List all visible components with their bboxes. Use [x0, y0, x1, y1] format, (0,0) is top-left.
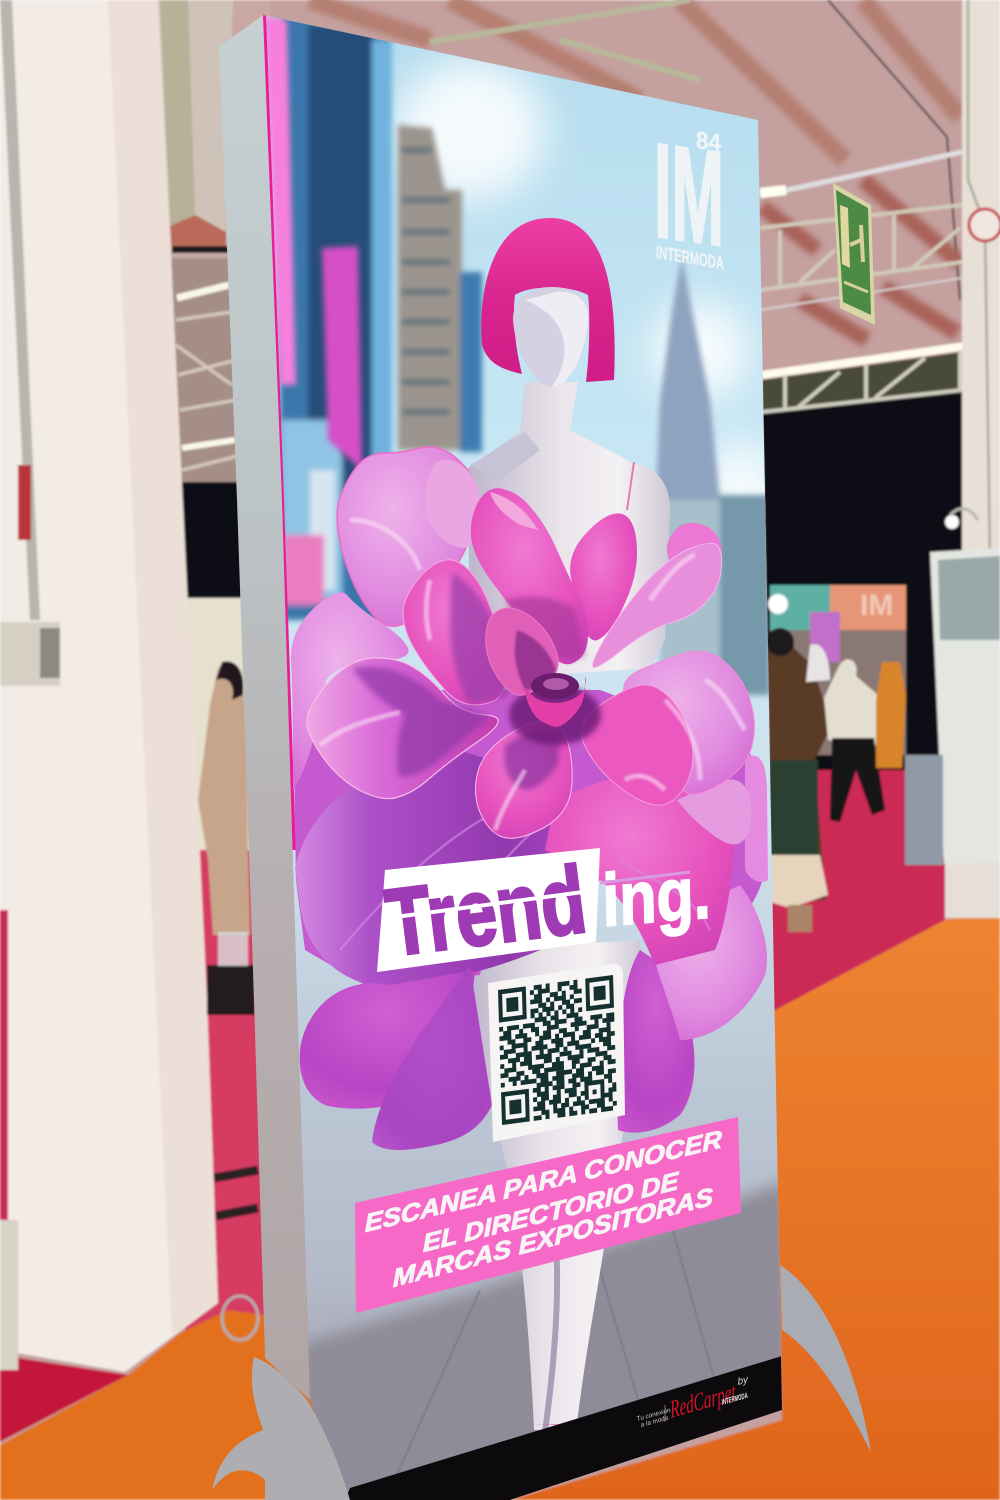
straps: [627, 462, 634, 510]
stamens: [531, 673, 579, 699]
crimson floor right: [765, 770, 945, 1012]
highlights: [320, 520, 745, 830]
banner text: [365, 1125, 722, 1293]
blurred city buildings: [280, 0, 770, 695]
Intermoda logo: INTERMODA: [656, 242, 724, 274]
left stand foot: [212, 1357, 350, 1500]
Trending label box: [377, 848, 600, 972]
translucent petal over body: [425, 460, 479, 548]
background: fair hall: IM: [860, 589, 893, 622]
top centre petal: [471, 488, 588, 664]
dark truss zone: [762, 352, 962, 415]
light strips right: [760, 152, 962, 196]
flower dress: [291, 447, 768, 1150]
Red Carpet footer logo: Tu conexión: [636, 1407, 671, 1423]
mannequin torso: [468, 382, 670, 680]
bottom black strip: [345, 1356, 782, 1500]
magenta neon signs: [264, 15, 362, 470]
QR code sticker: [488, 964, 625, 1142]
Red Carpet footer logo: a la moda: [640, 1414, 669, 1429]
ceiling beams top: [310, 0, 960, 160]
clouds: [395, 60, 780, 560]
petal right of neckline: [570, 513, 637, 640]
box upper left: [158, 0, 233, 232]
hair: [481, 218, 615, 382]
Trending title: Trend: [380, 847, 592, 977]
skirt streaks: [339, 818, 711, 950]
woman orange dress: [876, 662, 906, 768]
Intermoda logo: IM: [654, 115, 724, 275]
crimson corner left: [0, 1355, 128, 1442]
beams under truss: [762, 180, 960, 340]
right big petal: [623, 651, 754, 794]
red label: [18, 465, 31, 540]
right back petals: [745, 756, 768, 882]
Red Carpet footer logo: INTERMODA: [721, 1391, 748, 1407]
left front petal: [307, 658, 498, 799]
bottom centre petal: [476, 721, 572, 838]
black wall right: [762, 392, 965, 780]
info board right: [930, 548, 1000, 864]
sky background: [250, 0, 790, 1500]
gap left of panel: [160, 0, 270, 262]
QR code modules: [498, 977, 617, 1123]
mannequin legs: [468, 940, 641, 1432]
Intermoda logo: 84: [696, 127, 722, 157]
street pavement: [300, 1180, 790, 1500]
right stand foot: [780, 1265, 871, 1452]
booth right: [770, 585, 835, 750]
Red Carpet footer logo: [636, 1374, 749, 1429]
right mid petal: [582, 685, 693, 805]
lower skirt petals: [295, 745, 600, 986]
base mass of dress: [293, 690, 766, 988]
small centre petal: [486, 608, 558, 695]
left pillar: [0, 0, 218, 1372]
exit sign: [833, 183, 875, 325]
banner text: MARCAS EXPOSITORAS: [393, 1182, 714, 1293]
lamp right: [945, 515, 959, 529]
orange floor left: [0, 1310, 345, 1500]
poster: front face: [250, 0, 790, 1500]
pink call-to-action banner: [355, 1117, 741, 1313]
Trending title: ing.: [602, 850, 711, 942]
Red Carpet footer logo: RedCarpet: [668, 1378, 738, 1424]
side of totem: [219, 15, 310, 1400]
right wing petal: [593, 543, 722, 667]
upper left centre petal: [403, 560, 506, 705]
junction box: [0, 622, 60, 686]
top-left large petal: [337, 447, 476, 626]
man brown jacket: [768, 629, 832, 902]
banner text: EL DIRECTORIO DE: [423, 1167, 680, 1258]
Red Carpet footer logo: by: [737, 1374, 749, 1388]
face: [513, 287, 589, 387]
orange floor: [510, 912, 1000, 1500]
truss: [760, 205, 962, 290]
table and glass: [207, 965, 255, 1015]
right wing back: [666, 522, 722, 560]
dark flower throat: [509, 685, 601, 745]
centre cup petal: [525, 677, 586, 727]
Intermoda logo: [654, 115, 724, 275]
left mid petal: [291, 592, 409, 790]
banner text: ESCANEA PARA CONOCER: [365, 1125, 722, 1238]
man white shirt: [824, 659, 878, 745]
right column: [962, 0, 1000, 560]
woman left: [198, 663, 250, 935]
